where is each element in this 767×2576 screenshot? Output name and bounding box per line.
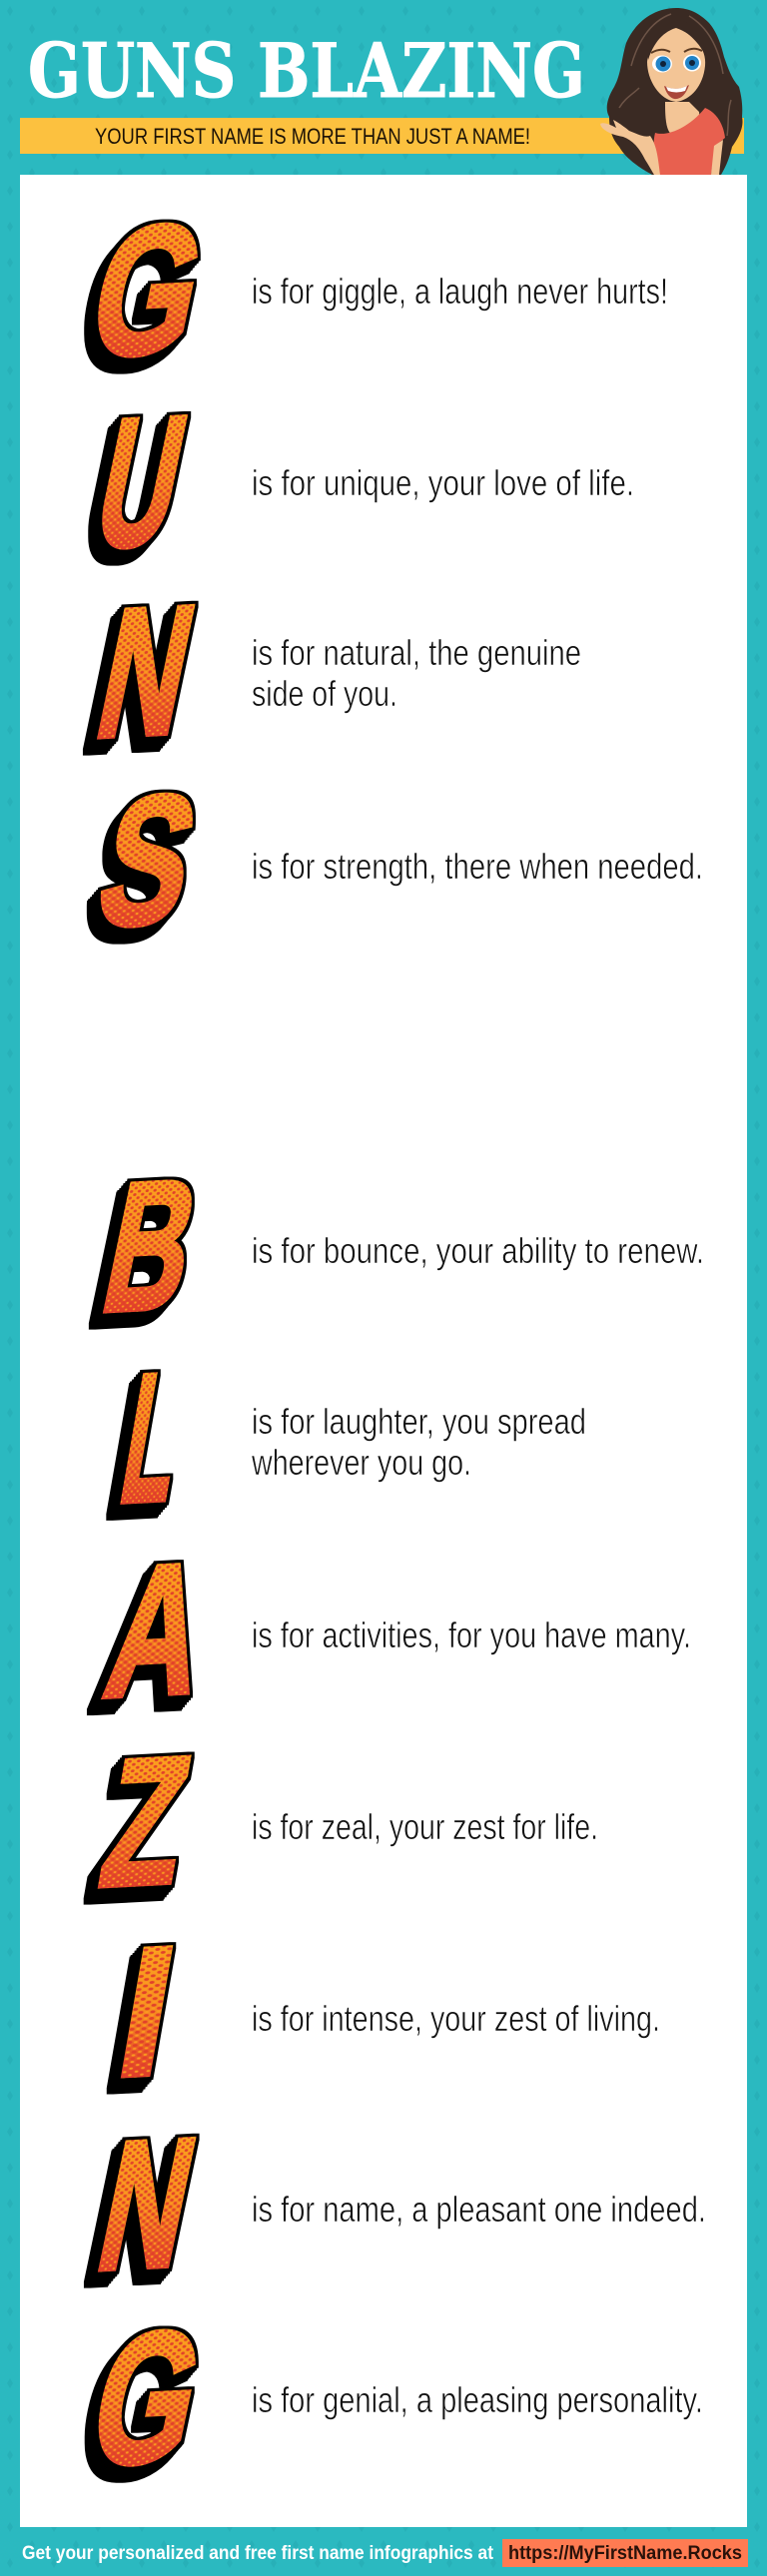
row: N [83, 568, 581, 777]
letter B: B [89, 1140, 213, 1350]
letter N: N [84, 2101, 210, 2309]
text: natural [252, 632, 581, 714]
letter I: I [106, 1907, 189, 2115]
letter U: U [82, 378, 201, 587]
row: S [84, 756, 703, 966]
subtitle banner: YOUR FIRST NAME IS MORE THAN JUST A NAME! [95, 124, 530, 149]
row: I [106, 1907, 660, 2115]
footer text: Get your personalized and free first name infographics at [22, 2543, 494, 2564]
text: giggle: is for giggle, a laugh never hurts! [252, 271, 668, 312]
letter A: A [94, 1525, 220, 1737]
illustration: cartoon woman [600, 8, 743, 175]
row: L [109, 1333, 586, 1542]
row: G second [76, 2291, 703, 2505]
row: N second [84, 2101, 706, 2309]
row: A [94, 1525, 691, 1737]
letter G: G [76, 186, 220, 395]
letter Z: Z [89, 1718, 202, 1925]
text: natural: is for natural, the genuine [252, 632, 581, 673]
text: intense: is for intense, your zest of living. [252, 1998, 660, 2039]
footer link badge: https://MyFirstName.Rocks [508, 2543, 742, 2564]
title: GUNS BLAZING [28, 27, 585, 115]
letter N: N [83, 568, 209, 777]
text: laughter [251, 1401, 586, 1483]
subtitle banner [20, 118, 744, 154]
letter G: G [76, 2291, 218, 2505]
text: laughter: is for laughter, you spread [252, 1401, 586, 1442]
row: Z [89, 1718, 598, 1925]
text: zeal: is for zeal, your zest for life. [252, 1806, 598, 1847]
text: laughter: wherever you go. [251, 1442, 471, 1483]
letter L: L [109, 1333, 197, 1542]
text: natural: side of you. [252, 673, 397, 714]
row: U [82, 378, 634, 587]
text: unique: is for unique, your love of life. [252, 462, 634, 503]
letter S: S [84, 756, 213, 966]
row: G [76, 186, 668, 395]
row: B [89, 1140, 704, 1350]
